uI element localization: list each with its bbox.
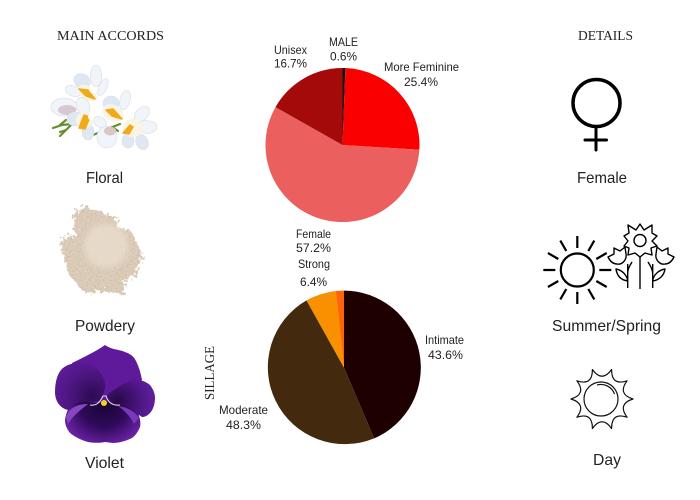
slice: female bbox=[265, 107, 419, 222]
icon: female symbol bbox=[573, 80, 620, 150]
icon: spring flowers bbox=[608, 224, 674, 289]
icon: floral white flowers bbox=[51, 65, 157, 152]
label: unisex: 16.7% bbox=[274, 56, 307, 70]
label: moderate bbox=[219, 403, 268, 432]
label: moderate: Moderate bbox=[219, 403, 268, 417]
slice: intimate bbox=[344, 291, 421, 438]
label: female share: 57.2% bbox=[296, 241, 331, 255]
label: floral: Floral bbox=[86, 170, 123, 187]
label: more feminine: More Feminine bbox=[384, 60, 459, 74]
label: strong: Strong bbox=[298, 257, 330, 271]
label: male: MALE bbox=[329, 35, 358, 49]
label: violet: Violet bbox=[85, 455, 125, 472]
label: summer spring: Summer/Spring bbox=[552, 318, 661, 335]
icon: sun bbox=[543, 236, 611, 304]
chart: gender pie bbox=[265, 68, 419, 222]
slice: strong bbox=[306, 291, 344, 368]
label: female: Female bbox=[577, 170, 627, 187]
label: moderate: 48.3% bbox=[226, 418, 261, 432]
slice: very strong bbox=[336, 291, 344, 368]
label: female share: Female bbox=[296, 227, 331, 241]
label: unisex bbox=[274, 43, 307, 70]
heading: main accords: MAIN ACCORDS bbox=[57, 29, 164, 44]
label: intimate: 43.6% bbox=[428, 348, 463, 362]
slice: moderate bbox=[268, 300, 374, 444]
label: powdery: Powdery bbox=[75, 318, 135, 335]
label: unisex: Unisex bbox=[274, 43, 307, 57]
label: day: Day bbox=[593, 452, 621, 469]
label: strong: 6.4% bbox=[300, 275, 327, 289]
label: female share bbox=[296, 227, 331, 255]
label: male: 0.6% bbox=[330, 50, 357, 64]
heading: sillage: SILLAGE bbox=[203, 346, 218, 400]
icon: day sun bbox=[571, 370, 633, 428]
label: intimate bbox=[425, 333, 464, 362]
icon: violet flower bbox=[55, 345, 155, 443]
slice: more feminine bbox=[342, 68, 419, 150]
icon: powder pile bbox=[60, 205, 143, 295]
label: more feminine bbox=[384, 60, 459, 89]
label: more feminine: 25.4% bbox=[404, 75, 438, 89]
label: strong bbox=[298, 257, 330, 289]
slice: male bbox=[342, 68, 345, 145]
chart: sillage pie bbox=[268, 291, 421, 444]
slice: unisex bbox=[276, 68, 342, 145]
label: male bbox=[329, 35, 358, 64]
label: intimate: Intimate bbox=[425, 333, 464, 347]
heading: details: DETAILS bbox=[578, 29, 633, 44]
